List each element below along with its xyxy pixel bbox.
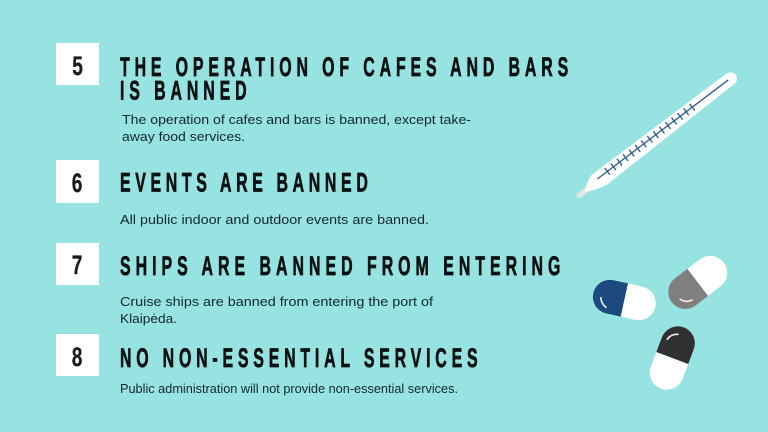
number badge 7: 7 <box>72 250 82 280</box>
text: ships description: Klaipėda. <box>120 311 177 326</box>
icon: black capsule <box>645 321 700 395</box>
panel: item 6 <box>56 160 429 227</box>
text: cafes and bars description <box>122 112 471 144</box>
panel: item 7 <box>56 243 560 326</box>
heading: services: NO NON-ESSENTIAL SERVICES <box>120 343 478 373</box>
heading: ships: SHIPS ARE BANNED FROM ENTERING <box>120 251 560 281</box>
icon: grey capsule <box>661 249 734 316</box>
text: ships description <box>120 294 433 326</box>
number badge 8 <box>56 334 99 376</box>
icon: blue capsule <box>590 277 659 323</box>
text: services description: Public administration will not provide non-essential services. <box>120 381 458 396</box>
icon: thermometer <box>576 72 737 198</box>
icon: grey capsule highlight <box>680 299 692 301</box>
heading: cafes and bars: THE OPERATION OF CAFES AND BARS <box>120 52 568 82</box>
number badge 7 <box>56 243 99 285</box>
number badge 6 <box>56 160 99 203</box>
panel: item 8 <box>56 334 478 396</box>
text: ships description: Cruise ships are banned from entering the port of <box>120 294 433 309</box>
text: cafes and bars description: The operation of cafes and bars is banned, except take- <box>122 112 471 127</box>
heading: cafes and bars: IS BANNED <box>120 75 247 106</box>
text: cafes and bars description: away food services. <box>122 129 245 144</box>
panel: item 5 <box>56 43 568 144</box>
heading: events: EVENTS ARE BANNED <box>120 167 368 198</box>
number badge 6: 6 <box>72 168 82 198</box>
heading: cafes and bars <box>120 52 568 106</box>
text: events description: All public indoor and outdoor events are banned. <box>120 212 429 227</box>
number badge 8: 8 <box>72 342 82 372</box>
number badge 5 <box>56 43 99 85</box>
icon: blue capsule highlight <box>601 298 606 307</box>
number badge 5: 5 <box>72 51 83 81</box>
icon: black capsule highlight <box>667 334 678 339</box>
